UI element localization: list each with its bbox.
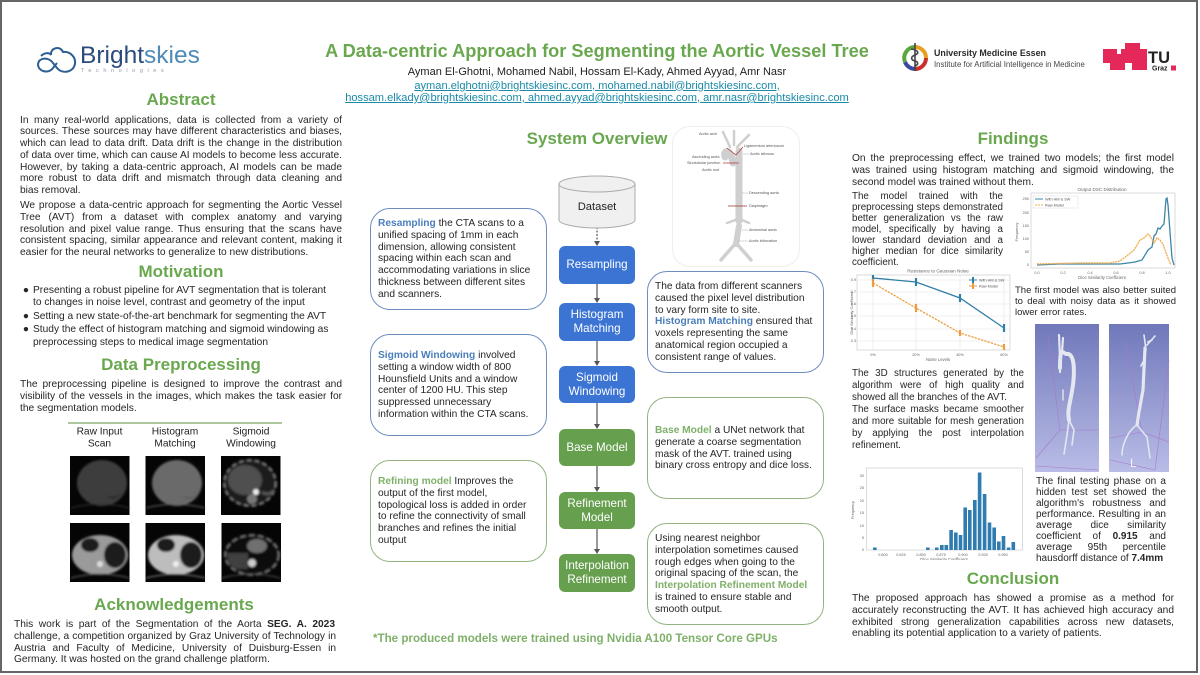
text: resampling: dimension, allowing consistent [378,242,516,253]
text: base model: binary cross entropy and dice loss. [655,460,812,471]
panel: histogram matching description [647,271,824,373]
panel: aorta anatomy diagram: Abdominal aorta [749,228,778,232]
chart: output DSC distribution: Output DSC Distribution [1077,187,1127,192]
text: resampling: and scanners. [378,289,442,300]
text: refining model: to refine the connectivity of small [378,511,526,522]
chart: resistance to Gaussian noise: Noise Levels [926,357,950,362]
chart: test set dice histogram: 30 [860,474,864,478]
logo: Brightskies: Brightskies [80,42,200,69]
chart: output DSC distribution [1014,187,1176,280]
text: 3D structures finding: and more suitable for mesh generation [852,416,1024,427]
text: refining model: branches and refines the initial [378,523,516,534]
text: interpolation refinement: Interpolation Refinement Model [655,580,807,591]
text: generalization finding [852,191,1003,268]
figure: preprocessing comparison grid: Sigmoid [233,426,270,438]
text: noise finding: to deal with noisy data as it showed [1015,296,1176,307]
text: preprocessing intro: visibility of the vessels in the images, which makes the task easier for [20,391,342,402]
text: generalization finding: The model trained with the [852,191,1003,202]
text: final testing results: The final testing phase on a [1036,476,1166,487]
text: refining model: output [378,535,406,546]
text: sigmoid windowing: Sigmoid Windowing involved [378,350,515,361]
text: final testing results: coefficient of 0.915 and [1036,531,1166,542]
text: interpolation refinement: interpolation sometimes caused [655,545,798,556]
list: motivation bullets: Study the effect of histogram matching and sigmoid windowing as [33,324,328,335]
authors: Ayman El-Ghotni, Mohamed Nabil, Hossam El-Kady, Ahmed Ayyad, Amr Nasr [408,66,786,78]
flowchart: sigmoid windowing: Windowing [569,384,625,398]
chart: test set dice histogram: Frequency [851,501,855,519]
text: preprocessing intro: the segmentation models. [20,403,137,414]
text: conclusion [852,593,1174,639]
text: histogram matching: caused the pixel level distribution [655,293,805,304]
text: preprocessing intro: The preprocessing pipeline is designed to improve the contrast and [20,379,342,390]
chart: test set dice histogram: 0.900 [958,553,968,557]
chart: test set dice histogram: 0.925 [978,553,988,557]
chart: resistance to Gaussian noise: 60% [1000,353,1008,357]
heading: System Overview: System Overview [527,129,667,148]
panel: resampling description [370,208,547,310]
text: generalization finding: better generalization vs the raw [852,213,1003,224]
text: resampling: unified spacing of 1mm in each [378,230,518,241]
figure: preprocessing comparison grid: Raw Input [77,426,123,438]
text: resampling: spacing within each scan and [378,253,511,264]
text: acknowledgements: Germany. It was hosted on the grand challenge platform. [14,654,270,665]
chart: output DSC distribution: With HM & SW [1045,198,1071,202]
figure: preprocessing comparison grid: Windowing [226,438,276,450]
text: generalization finding: model, specifically by having a [852,224,1003,235]
panel: sigmoid windowing description [370,334,547,436]
flowchart: refinement model: Model [581,510,613,524]
flowchart: resampling: Resampling [566,258,628,271]
text: interpolation refinement: original spacing of the scan, the [655,568,798,579]
text: abstract: more robust to data drift and mismatch through data cleaning and [20,173,342,184]
text: conclusion: The proposed approach has showed a promise as a method for [852,593,1174,604]
text: 3D structures finding: showed all the branches of the AVT. [852,392,1007,403]
chart: test set dice histogram: 0.950 [998,553,1008,557]
text: abstract [20,114,342,258]
text: abstract: Tree (AVT) from a dataset with complex anatomy and varying [20,212,342,223]
text: abstract: In many real-world applications, data is collected from a variety of [20,114,342,126]
text: noise finding: lower error rates. [1015,307,1087,318]
list: motivation bullets: to changes in noise level, contrast and geometry of the input [33,297,305,308]
author emails: ayman.elghotni@brightskiesinc.com, mohamed.nabil@brightskiesinc.com, [414,80,780,92]
panel: aorta anatomy diagram: Aortic bifurcation [749,239,777,243]
list: motivation bullets: ● [23,324,29,335]
figure: preprocessing comparison grid [68,422,282,582]
chart: test set dice histogram [851,468,1023,560]
panel: aorta anatomy diagram: Diaphragm [749,204,768,208]
chart: test set dice histogram: 5 [862,536,864,540]
text: final testing results: hidden test set showed the [1036,487,1166,498]
list: motivation bullets: preprocessing steps to medical image segmentation [33,337,268,348]
text: conclusion: accurately reconstructing the AVT. It has achieved high accuracy and [852,605,1174,616]
text: refining model: topological loss is added in order [378,500,526,511]
text: base model [655,425,812,471]
figure: 3D aorta renders: L [1130,456,1137,470]
chart: output DSC distribution: 0.2 [1060,271,1066,275]
text: refining model: Refining model Improves the [378,476,513,487]
logo: University Medicine Essen: Institute for Artificial Intelligence in Medicine [934,60,1085,69]
text: histogram matching: anatomical region occupied a [655,340,788,351]
logo: University Medicine Essen: University Medicine Essen [934,48,1046,58]
panel: aorta anatomy diagram [672,126,800,267]
text: noise finding: The first model was also better suited [1015,285,1176,296]
text: interpolation refinement: is trained to ensure stable and [655,592,792,603]
chart: test set dice histogram: 0.875 [936,553,946,557]
chart: output DSC distribution: 150 [1023,224,1029,228]
logo: TU Graz: TU [1148,49,1170,67]
panel: aorta anatomy diagram: Descending aorta [749,191,780,195]
flowchart: sigmoid windowing [559,366,635,403]
text: final testing results: hausdorff distance of 7.4mm [1036,553,1163,564]
chart: resistance to Gaussian noise: Dice Similarity Coefficient [850,291,854,334]
flowchart: refinement model [559,492,635,529]
text: abstract: easier for the neural networks to generalize to new distributions. [20,247,308,258]
text: histogram matching: consistent range of values. [655,352,776,363]
chart: output DSC distribution: 0 [1027,263,1029,267]
panel: aorta anatomy diagram: Aortic isthmus [750,152,774,156]
text: resampling: Resampling the CTA scans to a [378,218,524,229]
text: abstract: resolution and pixel value range. Thus ensuring that the scans have [20,224,342,235]
figure: preprocessing comparison grid: Matching [154,438,196,450]
chart: resistance to Gaussian noise: 0.3 [851,339,856,343]
text: acknowledgements: This work is part of the Segmentation of the Aorta SEG. A. 2023 [14,619,335,630]
flowchart: dataset cylinder [558,176,636,228]
flowchart: histogram matching [559,303,635,341]
chart: test set dice histogram: 0.800 [878,553,888,557]
list: motivation bullets [23,285,328,348]
text: interpolation refinement: Using nearest neighbor [655,533,760,544]
chart: test set dice histogram: 0 [862,548,864,552]
panel: base model description [647,397,824,499]
logo: Brightskies [37,42,200,74]
text: final testing results: average dice similarity [1036,520,1166,531]
chart: output DSC distribution: 100 [1023,237,1029,241]
text: acknowledgements [14,619,336,665]
text: sigmoid windowing: suppressed unnecessary [378,397,491,408]
text: interpolation refinement: rough edges when going to the [655,557,795,568]
panel: refining model description [370,460,547,562]
figure: preprocessing comparison grid: Histogram [152,426,198,438]
text: findings intro: On the preprocessing effect, we trained two models; the first model [852,153,1174,164]
list: motivation bullets: ● [23,285,29,296]
chart: output DSC distribution: 1.0 [1165,271,1171,275]
text: final testing results: average 95th percentile [1036,542,1166,553]
text: generalization finding: higher median for dice similarity [852,246,1003,257]
chart: resistance to Gaussian noise: 0% [870,353,876,357]
panel: aorta anatomy diagram: Ascending aorta [692,155,720,159]
text: final testing results: algorithm's robustness and [1036,498,1166,509]
logo: Brightskies: Technologies [81,68,168,74]
text: abstract: consistent spacing, similar appearance and relevant content, making it [20,235,342,246]
text: sigmoid windowing: setting a window width of 800 [378,362,511,373]
flowchart: refinement model: Refinement [567,496,627,510]
author emails [345,80,849,104]
text: conclusion: exhibited strong generalization capabilities across new datasets, [852,617,1174,628]
chart: output DSC distribution: 0.0 [1034,271,1040,275]
footnote: GPU note: *The produced models were trained using Nvidia A100 Tensor Core GPUs [373,632,778,645]
text: conclusion: enabling its potential application to a variety of patients. [852,628,1102,639]
text: interpolation refinement: smooth output. [655,604,722,615]
text: preprocessing intro [20,379,342,414]
chart: output DSC distribution: Frequency [1014,223,1019,241]
list: motivation bullets: Presenting a robust pipeline for AVT segmentation that is tolerant [33,285,326,296]
text: sigmoid windowing: Hounsfield Units and a window [378,374,517,385]
flowchart: base model [559,429,635,466]
text: base model: generate a coarse segmentation [655,437,801,448]
text: sigmoid windowing: center of 1200 HU. This step [378,385,508,396]
chart: test set dice histogram: 20 [860,499,864,503]
text: 3D structures finding [852,368,1024,451]
flowchart: interpolation refinement [559,554,635,592]
flowchart: interpolation refinement: Refinement [567,573,627,586]
text: sigmoid windowing [378,350,528,420]
text: abstract: We propose a data-centric approach for segmenting the Aortic Vessel [20,200,342,211]
text: findings intro: was trained using histogram matching and sigmoid windowing, the [852,165,1174,176]
text: refining model: output of the first model, [378,488,487,499]
chart: resistance to Gaussian noise: Resistance to Gaussian Noise [907,268,969,274]
chart: output DSC distribution: 0.8 [1139,271,1145,275]
chart: resistance to Gaussian noise: 0.7 [851,290,856,294]
chart: resistance to Gaussian noise: Raw Model [979,284,998,288]
text: interpolation refinement [655,533,807,615]
panel: interpolation refinement description [647,523,824,625]
title: A Data-centric Approach for Segmenting the Aortic Vessel Tree [325,41,869,61]
text: abstract: of data over time, which can cause AI models to become less accurate. [20,150,342,161]
chart: output DSC distribution: 200 [1023,211,1029,215]
text: histogram matching: The data from different scanners [655,281,802,292]
text: 3D structures finding: by applying the post interpolation [852,428,1024,439]
flowchart: resampling [559,246,635,284]
logo: TU Graz [1103,43,1176,72]
text: abstract: However, by taking a data-centric approach, AI models can be made [20,162,342,173]
heading: Acknowledgements: Acknowledgements [94,595,254,614]
chart: output DSC distribution: 50 [1025,250,1029,254]
text: base model: mask of the AVT. trained using [655,449,792,460]
flowchart: histogram matching: Histogram [571,308,623,321]
panel: aorta anatomy diagram: Aortic arch [699,132,717,136]
text: final testing results: performance. Resulting in an [1036,509,1166,520]
logo: University Medicine Essen [902,43,1085,71]
chart: resistance to Gaussian noise: 0.5 [851,314,856,318]
arrows: flowchart connectors [594,228,600,554]
flowchart: dataset cylinder: Dataset [578,201,617,213]
heading: Conclusion: Conclusion [967,569,1059,588]
text: generalization finding: preprocessing steps demonstrated [852,202,1003,213]
text: generalization finding: lower standard deviation and a [852,235,1003,246]
list: motivation bullets: Setting a new state-of-the-art benchmark for segmenting the AVT [33,311,326,322]
text: noise finding [1015,285,1176,318]
text: findings intro: second model was trained without them. [852,177,1034,188]
chart: output DSC distribution: Raw Model [1045,204,1064,208]
text: 3D structures finding: algorithm were of high quality and [852,380,1024,391]
flowchart: sigmoid windowing: Sigmoid [576,370,618,384]
heading: Abstract: Abstract [147,90,215,109]
list: motivation bullets: ● [23,311,29,322]
panel: aorta anatomy diagram: Sinotubular junction [687,161,720,165]
text: abstract: which can lead to data drift. Data drift is the change in the distribution [20,138,342,149]
text: acknowledgements: challenge, a competition organized by Graz University of Technology in [14,631,336,642]
author emails: hossam.elkady@brightskiesinc.com, ahmed.ayyad@brightskiesinc.com, amr.nasr@brightskiesinc.com [345,92,849,104]
text: abstract: bias removal. [20,185,81,196]
text: histogram matching: Histogram Matching ensured that [655,316,812,327]
chart: resistance to Gaussian noise: 0.4 [851,327,856,331]
panel: aorta anatomy diagram: Ligamentum arteriosum [744,144,784,148]
text: resampling: thickness between different sites [378,277,525,288]
text: acknowledgements: Austria and Faculty of Medicine, University of Duisburg-Essen in [14,643,336,654]
text: base model: Base Model a UNet network that [655,425,804,436]
text: generalization finding: coefficient. [852,257,899,268]
figure: 3D aorta renders [1035,324,1170,472]
text: sigmoid windowing: information within the CTA scans. [378,409,528,420]
text: findings intro [852,153,1174,188]
text: histogram matching: to vary form site to site. [655,305,760,316]
chart: resistance to Gaussian noise: With HM & SW [979,278,1005,282]
chart: test set dice histogram: 15 [860,511,864,515]
flowchart: base model: Base Model [566,440,628,454]
text: final testing results [1036,476,1166,564]
chart: output DSC distribution: 0.6 [1113,271,1119,275]
chart: output DSC distribution: 0.4 [1087,271,1093,275]
figure: preprocessing comparison grid: Scan [88,438,111,450]
text: 3D structures finding: The 3D structures generated by the [852,368,1024,379]
chart: output DSC distribution: Dice Similarity Coefficient [1078,275,1127,280]
text: abstract: sources. These sources may have different characteristics and biases, [20,126,342,137]
text: refining model [378,476,526,546]
flowchart: interpolation refinement: Interpolation [565,559,629,572]
heading: Data Preprocessing: Data Preprocessing [101,355,261,374]
text: resampling [378,218,530,300]
text: resampling: accommodating variations in slice [378,265,530,276]
chart: test set dice histogram: 0.825 [896,553,906,557]
chart: resistance to Gaussian noise: 40% [956,353,964,357]
text: 3D structures finding: refinement. [852,440,901,451]
chart: test set dice histogram: 10 [860,524,864,528]
chart: resistance to Gaussian noise: 20% [912,353,920,357]
chart: test set dice histogram: 25 [860,486,864,490]
chart: output DSC distribution: 250 [1023,197,1029,201]
chart: resistance to Gaussian noise: 0.6 [851,302,856,306]
text: 3D structures finding: The surface masks became smoother [852,404,1024,415]
heading: Findings: Findings [978,129,1048,148]
heading: Motivation: Motivation [138,262,224,281]
chart: test set dice histogram: 0.850 [916,553,926,557]
flowchart: histogram matching: Matching [573,322,621,335]
text: histogram matching [655,281,812,363]
chart: resistance to Gaussian noise [850,268,1010,362]
text: histogram matching: voxels representing the same [655,328,788,339]
panel: aorta anatomy diagram: Aortic root [702,168,720,172]
chart: resistance to Gaussian noise: 0.9 [851,278,856,282]
